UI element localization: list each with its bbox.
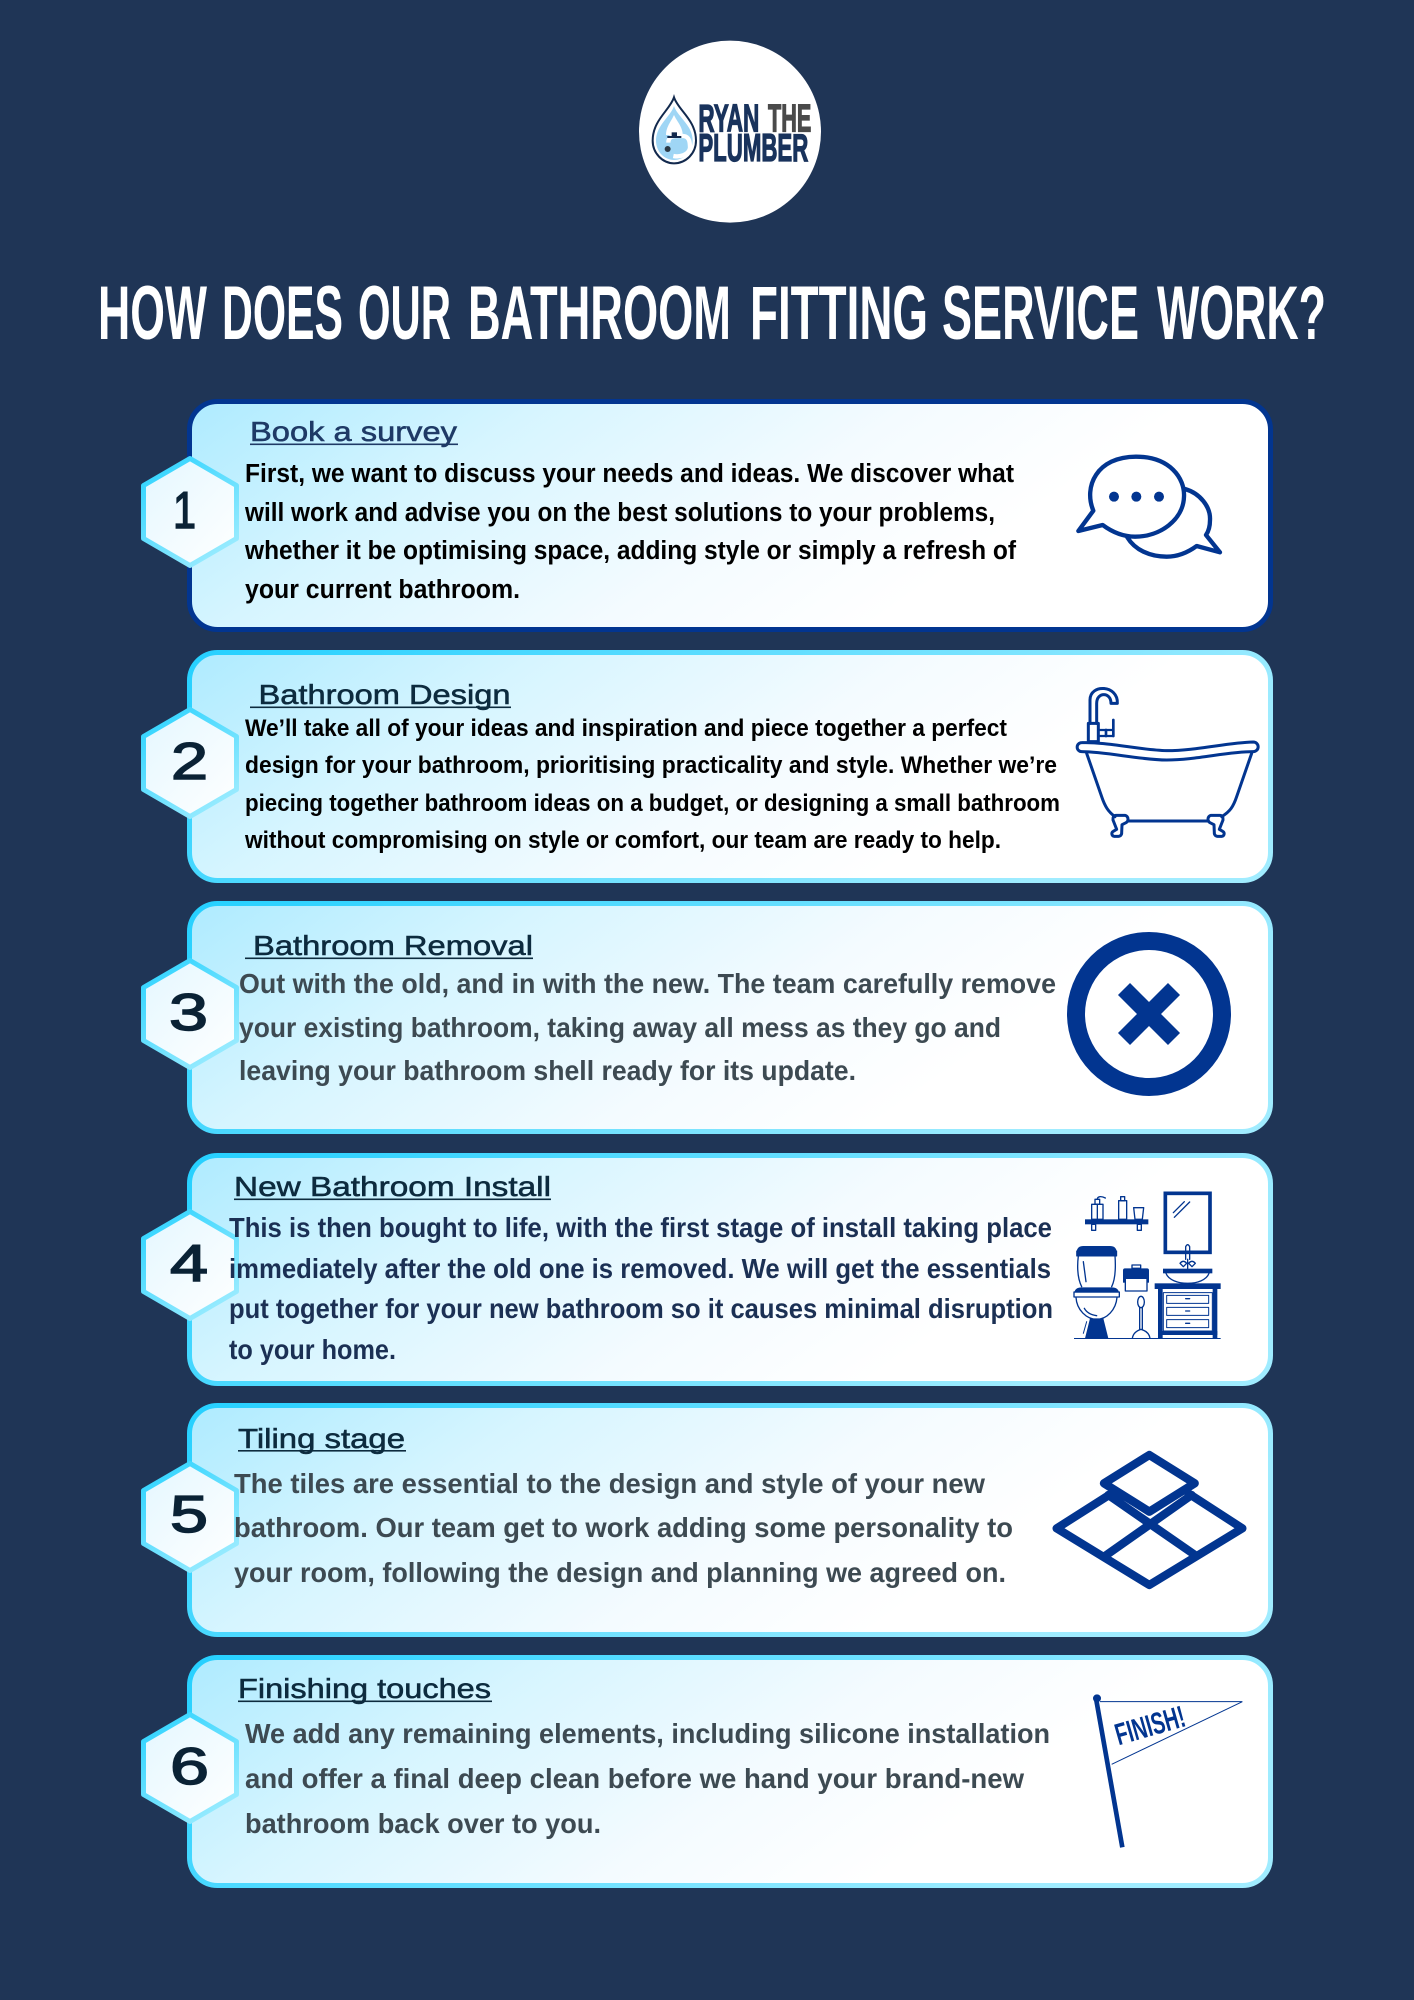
text block [245,1718,1050,1839]
text block [229,1212,1053,1365]
icon: finish flag [1093,1694,1242,1847]
heading: book a survey: Book a survey [250,416,457,447]
logo text [698,98,811,170]
badge: number 3 [144,960,236,1068]
text block [244,460,1016,604]
badge: number 6: 6 [170,1738,209,1796]
text block: bathroom. Our team get to work adding some personality to [234,1512,1013,1543]
title: HOW [98,271,207,356]
text block: your existing bathroom, taking away all mess as they go and [239,1012,1001,1043]
text block: and offer a final deep clean before we hand your brand-new [245,1763,1025,1794]
logo text: THE [768,98,811,141]
toilet brush [1132,1296,1150,1338]
text block: your current bathroom. [245,576,520,604]
icon: speech bubbles [1078,457,1220,557]
title: SERVICE [942,271,1139,356]
shelf with bottles [1085,1197,1148,1230]
badge: number 1: 1 [173,482,196,540]
title: BATHROOM [468,271,731,356]
panel: step 2 bathroom design [144,652,1270,880]
badge: number 4: 4 [170,1235,208,1293]
logo: Ryan the Plumber [639,41,821,223]
text block: design for your bathroom, prioritising practicality and style. Whether we’re [245,752,1057,779]
text block: First, we want to discuss your needs and ideas. We discover what [245,460,1014,488]
icon: finish flag: FINISH! [1111,1700,1189,1752]
text block: leaving your bathroom shell ready for its update. [239,1055,856,1086]
text block [234,1468,1013,1588]
heading: finishing touches: Finishing touches [238,1673,491,1704]
text block: bathroom back over to you. [245,1808,601,1839]
panel: step 1 book a survey [144,402,1270,630]
text block [239,968,1056,1086]
badge: number 1 [144,458,236,566]
text block: We’ll take all of your ideas and inspiration and piece together a perfect [245,715,1007,742]
title [98,271,1326,356]
badge: number 6 [144,1714,236,1822]
badge: number 4 [144,1212,236,1318]
badge: number 5: 5 [170,1486,208,1544]
icon: water drop with tap [653,97,696,163]
title: DOES [222,271,343,356]
icon: cross in circle [1076,941,1222,1087]
panel: step 3 bathroom removal [144,904,1270,1132]
badge: number 2: 2 [171,733,208,791]
text block: immediately after the old one is removed. We will get the essentials [229,1253,1051,1284]
text block: your room, following the design and planning we agreed on. [234,1557,1006,1588]
heading: new bathroom install: New Bathroom Install [234,1171,551,1202]
heading: bathroom removal: Bathroom Removal [253,930,533,961]
icon: bathtub [1077,688,1258,836]
text block: We add any remaining elements, including silicone installation [245,1718,1050,1749]
badge: number 5 [144,1464,236,1570]
panel: step 5 tiling stage [144,1406,1270,1634]
text block: This is then bought to life, with the first stage of install taking place [229,1212,1052,1243]
heading: tiling stage: Tiling stage [238,1423,405,1454]
text block: whether it be optimising space, adding style or simply a refresh of [244,537,1016,565]
mirror [1165,1193,1210,1252]
tissue box [1123,1265,1149,1291]
icon: floor tiles [1057,1455,1242,1585]
title: FITTING [750,271,928,356]
text block: piecing together bathroom ideas on a budget, or designing a small bathroom [245,790,1060,817]
panel: step 4 new bathroom install [144,1156,1270,1384]
title: OUR [358,271,451,356]
panel: step 6 finishing touches [144,1658,1270,1886]
icon: bathroom fixtures [1074,1193,1221,1339]
text block: to your home. [229,1334,396,1365]
heading: bathroom design: Bathroom Design [258,679,510,710]
text block: Out with the old, and in with the new. The team carefully remove [239,968,1056,999]
text block: put together for your new bathroom so it causes minimal disruption [229,1293,1053,1324]
toilet [1074,1246,1119,1338]
vanity and basin [1155,1245,1221,1338]
floor [1074,1338,1221,1339]
logo text: PLUMBER [698,127,808,170]
text block: The tiles are essential to the design and style of your new [234,1468,985,1499]
logo text: RYAN [698,98,759,141]
text block: will work and advise you on the best solutions to your problems, [244,499,995,527]
badge: number 3: 3 [169,984,208,1042]
text block: without compromising on style or comfort, our team are ready to help. [244,827,1001,854]
text block [244,715,1060,854]
badge: number 2 [144,710,236,816]
